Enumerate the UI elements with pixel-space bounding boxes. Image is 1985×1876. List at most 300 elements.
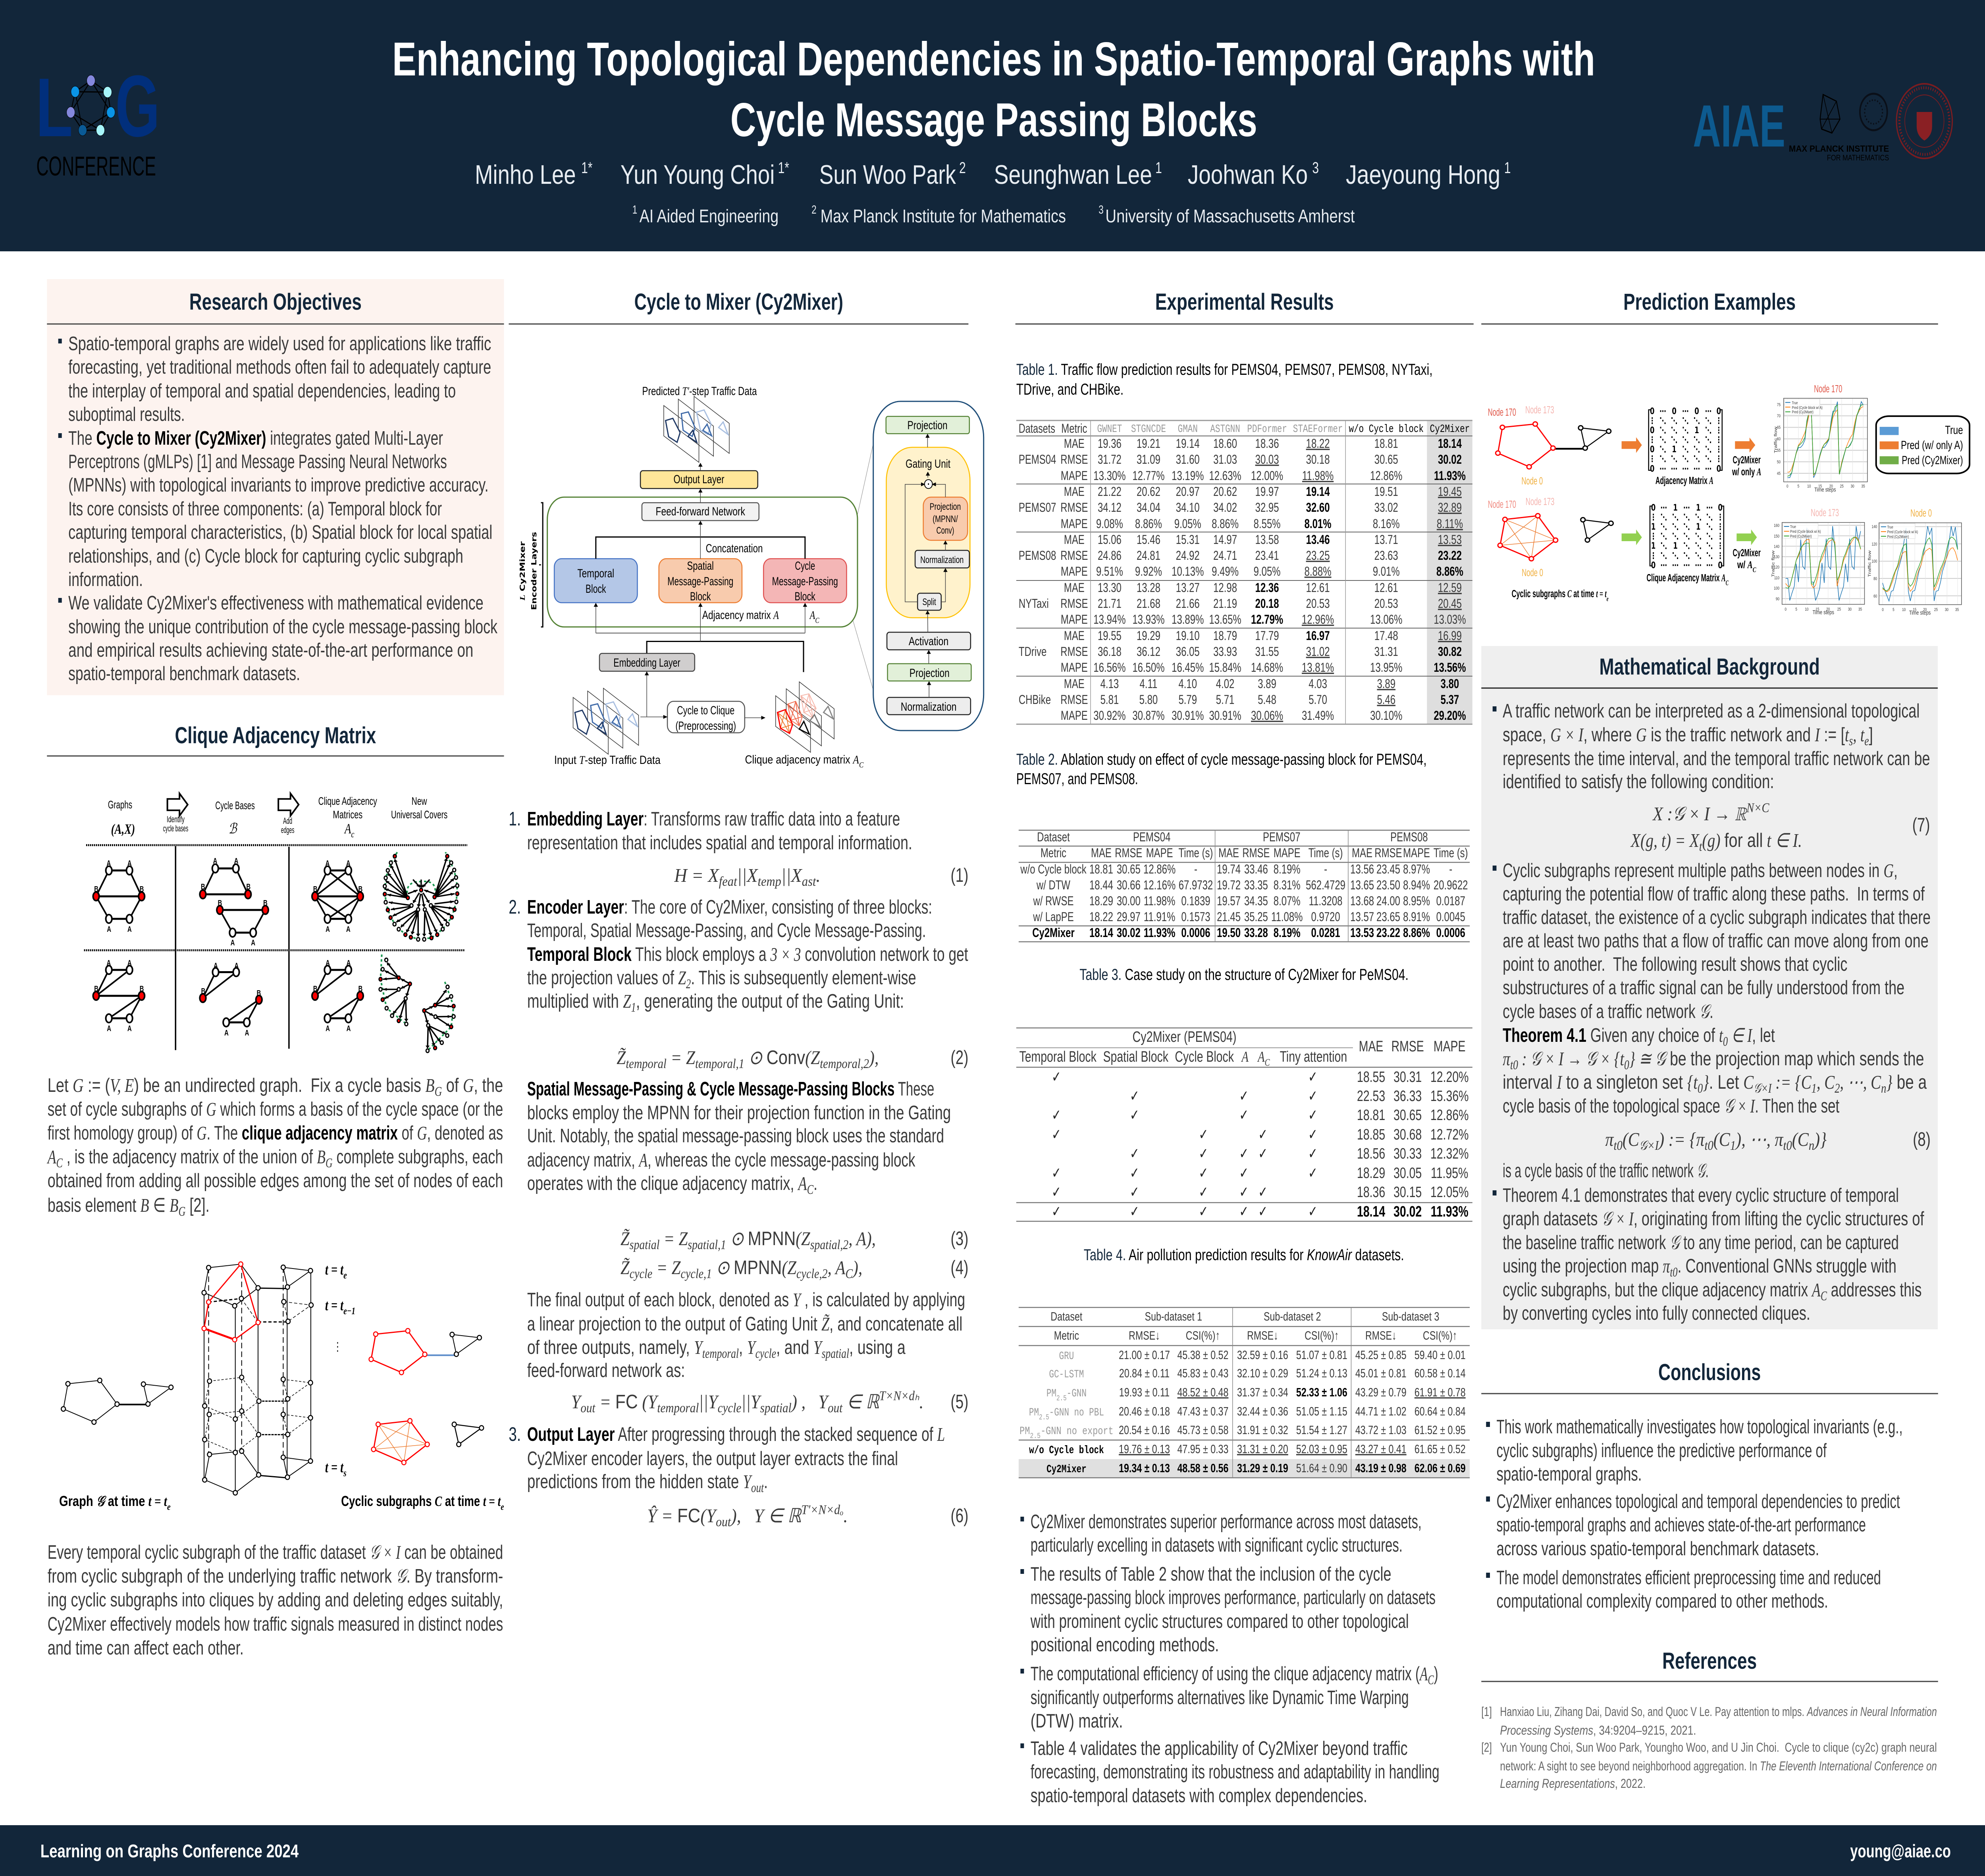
figure: prediction examples: 20 [1923,607,1927,612]
table 4: air pollution prediction: 19.76 ± 0.13 [1119,1442,1170,1456]
figure: prediction examples: ⋯ [1706,503,1713,513]
table 2: ablation study: 18.22 [1089,910,1113,924]
figure: Cy2Mixer architecture: Temporal [577,567,614,580]
table 3: case study: 12.05% [1430,1184,1469,1201]
figure: Cy2Mixer architecture: (MPNN/ [933,514,958,524]
figure: prediction examples: Pred (Cycle block w/ A) [1887,530,1918,534]
panel: mathematical background: Theorem 4.1 demonstrates that every cyclic structure of temporal [1503,1185,1899,1206]
panel: mathematical background: πt0 : 𝒢 × I → 𝒢 × {t0} ≅ 𝒢 be the projection map which sends the [1503,1048,1924,1072]
footer banner: Learning on Graphs Conference 2024 [40,1841,299,1861]
caption: table 1: Table 1. Traffic flow prediction results for PEMS04, PEMS07, PEMS08, NYTaxi, [1016,361,1433,378]
panel: mathematical background [1481,646,1938,1329]
bullet list: experimental findings: Cy2Mixer demonstrates superior performance across most datasets, [1031,1511,1422,1533]
figure: Cy2Mixer architecture: Cycle to Clique [677,704,734,717]
bullet list: experimental findings: particularly excelling in datasets with significant cyclic structures. [1031,1535,1403,1556]
table 4: air pollution prediction: 61.52 ± 0.95 [1415,1423,1466,1437]
figure: prediction examples: Node 170 [1814,383,1842,395]
title [392,33,1595,147]
authors: 1* [778,159,789,177]
figure: prediction examples: 25 [1840,484,1844,489]
affiliations: AI Aided Engineering [640,206,779,226]
panel: mathematical background: is a cycle basis of the traffic network 𝒢. [1503,1160,1709,1182]
figure: prediction examples: ⋱ [1672,512,1679,523]
table 1: traffic flow prediction: MAE [1064,484,1085,499]
table 2: ablation study: 0.1573 [1181,910,1210,924]
figure: prediction examples: ⋯ [1705,406,1711,416]
figure: prediction examples: 90 [1776,597,1780,602]
table 3: case study: ✓ [1199,1145,1208,1162]
table 1: traffic flow prediction: 21.68 [1137,596,1160,611]
table 1: traffic flow prediction: 8.86% [1436,564,1463,578]
table 4: air pollution prediction: CSI(%)↑ [1305,1328,1339,1342]
table 4: air pollution prediction: PM2.5-GNN no export [1019,1425,1114,1441]
table 3: case study: 30.15 [1393,1184,1422,1201]
table 3: case study: ✓ [1130,1183,1139,1201]
table 2: ablation study: 13.65 [1350,878,1374,892]
table 2: ablation study: 35.25 [1244,910,1268,924]
figure: prediction examples: 70 [1777,414,1781,418]
bullet list: experimental findings: The computational efficiency of using the clique adjacency matrix (AC) [1031,1663,1438,1687]
table 2: ablation study: 33.28 [1244,925,1268,940]
figure: prediction examples: Pred (Cycle block w/ A) [1790,529,1821,534]
figure: prediction examples: 0 [1650,464,1654,474]
figure: graph over time and cyclic subgraphs: t = te [325,1261,347,1281]
figure: Cy2Mixer architecture [518,384,984,769]
table 3: case study: Cycle Block [1175,1049,1234,1065]
equation 1: H = X feat||X temp||X ast. [674,865,821,889]
table 1: traffic flow prediction: 4.11 [1140,677,1157,691]
figure: prediction examples: 1 [1696,503,1700,513]
figure: prediction examples: 0 [1694,406,1699,416]
table 1: traffic flow prediction: 15.31 [1176,532,1200,547]
table 3: case study: 30.68 [1393,1126,1422,1143]
table 3: case study: 15.36% [1430,1088,1469,1105]
table 3: case study: ✓ [1258,1203,1268,1220]
table 1: traffic flow prediction: PEMS07 [1019,500,1056,515]
table 1: traffic flow prediction: 13.56% [1434,660,1466,675]
authors: Seunghwan Lee [994,160,1152,190]
equation 6 [647,1503,968,1529]
figure: prediction examples: True [1887,525,1893,529]
table 4: air pollution prediction: 48.52 ± 0.48 [1178,1385,1228,1399]
table 3: case study: 22.53 [1357,1088,1385,1105]
table 1: traffic flow prediction: MAPE [1061,564,1088,578]
table 2: ablation study: 18.14 [1089,925,1113,940]
table 1: traffic flow prediction: 30.03 [1255,452,1279,467]
table 1: traffic flow prediction: MAPE [1061,612,1088,627]
logo: LoG conference: CONFERENCE [36,151,156,181]
bullet list: research objectives [58,333,497,684]
table 3: case study: ✓ [1052,1106,1061,1124]
table 2: ablation study: w/ DTW [1036,878,1070,892]
figure: prediction examples: ⋱ [1661,522,1667,532]
figure: prediction examples: ⋯ [1694,464,1700,474]
panel: mathematical background: Cyclic subgraphs represent multiple paths between nodes in G, [1503,860,1898,881]
figure: prediction examples: Pred (Cy2Mixer) [1902,453,1963,467]
figure: prediction examples: ⋱ [1661,531,1667,542]
figure: graphs, cycle bases, clique adjacency matrices, universal covers: Matrices [333,809,362,821]
figure: Cy2Mixer architecture: Feed-forward Network [656,505,746,518]
table 1: traffic flow prediction: 15.84% [1209,660,1241,675]
table 2: ablation study: 30.00 [1117,894,1141,908]
table 4: air pollution prediction: 62.06 ± 0.69 [1415,1461,1466,1475]
logo: AIAE: AIAE [1693,93,1785,160]
table 2: ablation study: PEMS08 [1390,830,1428,844]
figure: prediction examples: 10 [1902,607,1906,612]
table 2: ablation study: 8.91% [1403,910,1430,924]
panel: mathematical background: cycle basis of the topological space 𝒢 × I. Then the set [1503,1095,1839,1117]
table 2: ablation study: MAPE [1403,846,1430,860]
table 1: traffic flow prediction: 18.79 [1213,629,1237,643]
table 4: air pollution prediction: 60.64 ± 0.84 [1415,1404,1466,1418]
table 1: traffic flow prediction: 30.87% [1132,708,1165,723]
table 1: traffic flow prediction: 23.41 [1255,548,1279,563]
reference list: Learning Representations , 2022. [1500,1776,1646,1791]
logo: LoG conference: L [36,61,73,154]
table 1: traffic flow prediction: 4.13 [1100,677,1119,691]
figure: prediction examples: ⋯ [1671,464,1677,474]
table 1: traffic flow prediction: 4.02 [1216,677,1234,691]
table 1: traffic flow prediction: 34.12 [1098,500,1122,515]
equation 7: (7) [1912,814,1930,836]
table 1: traffic flow prediction: 34.10 [1176,500,1200,515]
table 1: traffic flow prediction: ASTGNN [1210,423,1240,436]
table 2: ablation study: MAE [1091,846,1112,860]
table 1: traffic flow prediction: 36.18 [1098,644,1122,659]
figure: prediction examples: 10 [1805,607,1809,612]
table 1: traffic flow prediction: 3.80 [1441,677,1459,691]
bullet list: experimental findings: Table 4 validates the applicability of Cy2Mixer beyond traffic [1031,1738,1408,1759]
table 4: air pollution prediction: 21.00 ± 0.17 [1119,1348,1170,1362]
table 2: ablation study: 21.45 [1217,910,1241,924]
table 1: traffic flow prediction: 31.49% [1302,708,1334,723]
table 2: ablation study: Cy2Mixer [1032,925,1075,940]
table 3: case study: MAPE [1434,1038,1465,1055]
figure: Cy2Mixer architecture: Predicted T′-step Traffic Data [642,384,757,398]
figure: prediction examples: 20 [1829,484,1833,489]
table 1: traffic flow prediction: 23.25 [1306,548,1330,563]
text: model description: Temporal Block This block employs a 3 × 3 convolution network to get [527,944,968,965]
table 4: air pollution prediction: 45.83 ± 0.43 [1178,1366,1228,1380]
footer banner [0,1825,1985,1876]
figure: prediction examples: Pred (Cycle block w/ A) [1792,405,1823,410]
figure: prediction examples: ⋱ [1661,512,1667,523]
figure: prediction examples: Node 0 [1521,475,1543,487]
table 1: traffic flow prediction: 5.46 [1377,692,1395,707]
panel: mathematical background: cycle bases of a traffic network 𝒢. [1503,1001,1713,1022]
figure: Cy2Mixer architecture: Cycle [795,559,815,573]
equations 3 and 4: (4) [951,1257,968,1278]
text: model description: Unit. Notably, the spatial message-passing block uses the standard [527,1125,944,1147]
text: model description: 1. [509,808,521,830]
equation 7: X :𝒢 × I → ℝ N×C [1652,801,1769,825]
title: Cycle Message Passing Blocks [730,93,1257,147]
table 3: case study: ✓ [1199,1126,1208,1143]
table 1: traffic flow prediction: 29.20% [1434,708,1466,723]
figure: prediction examples: 0 [1650,406,1654,416]
table 1: traffic flow prediction: 9.49% [1212,564,1239,578]
table 1: traffic flow prediction: 34.02 [1213,500,1237,515]
text: temporal cyclic subgraphs: Cy2Mixer effectively models how traffic signals measured in distinct nodes [48,1614,503,1635]
equation 5: (5) [951,1391,968,1413]
table 2: ablation study: 0.1839 [1181,894,1210,908]
table 2: ablation study: MAPE [1146,846,1173,860]
table 1: traffic flow prediction: 15.46 [1137,532,1160,547]
table 1: traffic flow prediction: 24.86 [1098,548,1122,563]
equation 8 [1605,1129,1931,1153]
table 1: traffic flow prediction: 31.09 [1137,452,1160,467]
figure: prediction examples: ⋮ [1717,551,1723,561]
figure: prediction examples: 0 [1650,425,1654,436]
authors: 2 [959,159,966,177]
figure: prediction examples: ⋱ [1682,454,1689,464]
bullet list: conclusions: computational complexity compared to other methods. [1496,1591,1828,1612]
table 3: case study: 18.81 [1357,1107,1385,1124]
figure: prediction examples: ⋯ [1683,560,1690,571]
table 1: traffic flow prediction: 21.19 [1213,596,1237,611]
figure: prediction examples: ⋯ [1661,503,1667,513]
figure: graph over time and cyclic subgraphs: Graph 𝒢 at time t = te [59,1493,171,1512]
figure: prediction examples: ⋱ [1672,522,1679,532]
figure: prediction examples: Node 173 [1526,496,1554,507]
table 1: traffic flow prediction: 14.68% [1251,660,1283,675]
table 4: air pollution prediction: 43.72 ± 1.03 [1355,1423,1407,1437]
equations 3 and 4: (3) [951,1228,968,1249]
bullet list: research objectives: (MPNNs) with topological invariants to improve predictive accuracy. [68,474,489,496]
figure: prediction examples: 0 [1717,406,1721,416]
caption: table 4: Table 4. Air pollution prediction results for KnowAir datasets. [1084,1246,1404,1264]
table 3: case study: MAE [1359,1038,1383,1055]
figure: prediction examples: 0 [1650,444,1654,455]
figure: Cy2Mixer architecture: AC [809,608,819,625]
authors: 1 [1155,159,1162,177]
table 1: traffic flow prediction: 36.05 [1176,644,1200,659]
figure: prediction examples: ⋱ [1695,531,1702,542]
table 1: traffic flow prediction: 8.86% [1135,517,1162,531]
text: model description: of three outputs, namely, Ytemporal, Ycycle, and Yspatial, using a [527,1337,906,1361]
bullet list: conclusions [1486,1416,1903,1612]
figure: prediction examples: ⋯ [1682,406,1689,416]
figure: Cy2Mixer architecture: Encoder Layers [530,532,538,610]
figure: prediction examples: ⋮ [1650,551,1657,561]
text: clique adjacency matrix definition [46,1075,503,1219]
table 1: traffic flow prediction: 8.01% [1305,517,1332,531]
equation 2: Z̃temporal = Z temporal,1 ⊙ Conv(Ztemporal,2 ), [617,1047,879,1071]
table 2: ablation study: w/o Cycle block [1020,862,1087,876]
bullet list: research objectives: spatio-temporal benchmark datasets. [68,663,300,684]
table 1: traffic flow prediction: 5.37 [1441,692,1459,707]
figure: Cy2Mixer architecture: (Preprocessing) [675,719,736,733]
figure: prediction examples: True [1790,524,1796,529]
table 1: traffic flow prediction: 13.93% [1132,612,1165,627]
table 2: ablation study: 67.9732 [1179,878,1213,892]
table 1: traffic flow prediction: 5.80 [1139,692,1158,707]
bullet list: conclusions: Cy2Mixer enhances topological and temporal dependencies to predict [1496,1491,1900,1512]
table 3: case study [1016,1028,1472,1221]
caption: table 3: Table 3. Case study on the structure of Cy2Mixer for PeMS04. [1079,966,1409,983]
table 3: case study: 12.86% [1430,1107,1469,1124]
table 1: traffic flow prediction: MAE [1064,532,1085,547]
table 2: ablation study: 18.29 [1089,894,1113,908]
table 3: case study: ✓ [1052,1183,1061,1201]
table 4: air pollution prediction: 32.44 ± 0.36 [1237,1404,1288,1418]
figure: prediction examples: 35 [1955,607,1959,612]
table 1: traffic flow prediction: 30.18 [1306,452,1330,467]
table 1: traffic flow prediction: 8.11% [1437,517,1463,531]
table 1: traffic flow prediction: 18.14 [1438,436,1462,451]
table 2: ablation study: 0.0281 [1311,925,1340,940]
figure: Cy2Mixer architecture: L Cy2Mixer [518,541,526,601]
figure: prediction examples: Time steps [1909,609,1931,616]
table 2: ablation study: 8.19% [1274,925,1301,940]
table 2: ablation study: 19.74 [1217,862,1241,876]
panel: mathematical background: identified to satisfy the following condition: [1503,771,1774,792]
figure: prediction examples: ⋱ [1682,416,1689,426]
table 2: ablation study: PEMS07 [1263,830,1301,844]
figure: prediction examples: Adjacency Matrix A [1655,474,1713,486]
figure: Cy2Mixer architecture: Adjacency matrix A [702,608,779,622]
table 2: ablation study: 0.0187 [1436,894,1465,908]
figure: prediction examples: Cyclic subgraphs C at time t = te [1512,588,1609,603]
affiliations: 1 [632,203,637,216]
table 2: ablation study: 8.31% [1274,878,1301,892]
equation 8: πt0(C𝒢×I) := {π t0(C1), ⋯, π t0(Cn)} [1605,1129,1827,1153]
figure: prediction examples: ⋮ [1649,435,1655,445]
figure: prediction examples: ⋱ [1706,541,1713,551]
table 2: ablation study: 30.65 [1117,862,1141,876]
figure: prediction examples: 55 [1777,448,1781,453]
figure: prediction examples: Traffic flow [1773,426,1778,453]
table 1: traffic flow prediction: RMSE [1060,500,1088,515]
panel: mathematical background: graph datasets 𝒢 × I, originating from lifting the cyclic structures of [1503,1208,1924,1230]
table 3: case study: Spatial Block [1103,1049,1168,1065]
table 3: case study: ✓ [1239,1164,1249,1182]
heading: research objectives: Research Objectives [189,289,362,314]
figure: prediction examples: ⋮ [1715,454,1722,464]
figure: Cy2Mixer architecture: Projection [910,666,950,680]
text: temporal cyclic subgraphs [48,1542,503,1659]
figure: prediction examples: 25 [1934,607,1938,612]
logo: LoG conference: G [115,58,160,155]
logo: Max Planck Institute [1789,94,1889,162]
figure: prediction examples: ⋮ [1717,512,1723,523]
table 1: traffic flow prediction: 9.01% [1373,564,1400,578]
panel: mathematical background: represents the time interval, and the temporal traffic network can be [1503,748,1930,769]
figure: prediction examples: ⋱ [1706,512,1713,523]
table 4: air pollution prediction: Metric [1054,1328,1079,1342]
table 2: ablation study: w/ RWSE [1033,894,1073,908]
table 1: traffic flow prediction: MAPE [1061,708,1088,723]
figure: prediction examples: 0 [1718,503,1723,513]
figure: prediction examples: ⋱ [1671,416,1677,426]
figure: prediction examples: ⋮ [1715,425,1722,436]
table 1: traffic flow prediction: MAPE [1061,660,1088,675]
table 2: ablation study: w/ LapPE [1033,910,1074,924]
equation 5: Yout = FC (Ytemporal ||Ycycle||Yspatial) , Y out ∈ ℝ T×N×dₕ . [571,1389,923,1415]
heading: conclusions: Conclusions [1658,1359,1761,1385]
table 2: ablation study: 23.65 [1376,910,1400,924]
text: model description: operates with the clique adjacency matrix, AC. [527,1173,817,1197]
figure: prediction examples: 1 [1651,522,1655,532]
table 3: case study: ✓ [1258,1183,1268,1201]
figure: Cy2Mixer architecture: Input T-step Traffic Data [554,753,661,767]
table 1: traffic flow prediction: Metric [1061,421,1087,436]
table 4: air pollution prediction: 45.01 ± 0.81 [1355,1366,1407,1380]
table 1: traffic flow prediction: 15.06 [1098,532,1122,547]
figure: prediction examples: 1 [1672,444,1677,455]
figure: prediction examples: Clique Adjacency Matrix AC [1646,572,1729,587]
table 1: traffic flow prediction: 5.70 [1309,692,1327,707]
table 2: ablation study: - [1324,862,1327,876]
authors [475,159,1511,190]
table 1: traffic flow prediction: 16.50% [1132,660,1165,675]
table 1: traffic flow prediction: 24.92 [1176,548,1200,563]
figure: prediction examples: Node 170 [1488,406,1516,418]
figure: Cy2Mixer architecture: Split [922,597,936,607]
table 1: traffic flow prediction: 16.45% [1172,660,1204,675]
table 1: traffic flow prediction: 31.72 [1098,452,1122,467]
text: model description: adjacency matrix, A, whereas the cycle message-passing block [527,1149,915,1171]
table 3: case study: ✓ [1239,1183,1249,1201]
table 1: traffic flow prediction: 18.81 [1374,436,1398,451]
figure: prediction examples: Pred (w/ only A) [1901,438,1963,452]
figure: prediction examples: 35 [1858,607,1862,612]
table 2: ablation study: 23.50 [1376,878,1400,892]
figure: prediction examples: ⋱ [1694,444,1700,455]
table 1: traffic flow prediction: STGNCDE [1131,423,1166,436]
table 2: ablation study: 30.02 [1117,925,1141,940]
table 3: case study: ✓ [1258,1145,1268,1162]
table 3: case study: 18.14 [1357,1203,1385,1220]
reference list: network: A sight to see beyond neighborhood aggregation. In The Eleventh International Conference on [1500,1759,1937,1773]
table 4: air pollution prediction: Sub-dataset 3 [1382,1309,1439,1323]
equation 1: (1) [951,865,968,886]
figure: graph over time and cyclic subgraphs: Cyclic subgraphs C at time t = te [341,1493,504,1512]
table 1: traffic flow prediction: 20.62 [1213,484,1237,499]
table 1: traffic flow prediction: 13.27 [1176,580,1200,595]
table 3: case study: 12.32% [1430,1145,1469,1162]
figure: prediction examples: ⋱ [1672,551,1679,561]
figure: graphs, cycle bases, clique adjacency matrices, universal covers: Universal Covers [391,809,447,821]
table 1: traffic flow prediction: CHBike [1019,692,1051,707]
table 4: air pollution prediction: 47.95 ± 0.33 [1178,1442,1228,1456]
bullet list: research objectives: relationships, and (c) Cycle block for capturing cyclic subgraph [68,546,463,567]
bullet list: research objectives: Its core consists of three components: (a) Temporal block for [68,498,442,520]
figure: graphs, cycle bases, clique adjacency matrices, universal covers: AABBAA [313,958,362,1033]
table 1: traffic flow prediction: 16.99 [1438,629,1462,643]
figure: Cy2Mixer architecture: Conv) [937,526,954,536]
figure: prediction examples: Pred (Cy2Mixer) [1887,534,1909,539]
figure: prediction examples: ⋱ [1683,551,1690,561]
text: clique adjacency matrix definition: set of cycle subgraphs of G which forms a basis of the cycle space (or the [48,1099,503,1120]
table 2: ablation study: 0.9720 [1311,910,1340,924]
figure: prediction examples: ⋱ [1659,425,1666,436]
bullet list: research objectives: We validate Cy2Mixer's effectiveness with mathematical evidence [68,592,484,614]
table 4: air pollution prediction: 52.03 ± 0.95 [1296,1442,1347,1456]
table 2: ablation study: 12.16% [1143,878,1176,892]
figure: graphs, cycle bases, clique adjacency matrices, universal covers: Add [283,816,292,826]
heading: references: References [1662,1648,1757,1674]
table 2: ablation study: 30.66 [1117,878,1141,892]
figure: prediction examples: ⋮ [1649,416,1655,426]
figure: prediction examples: 0 [1882,607,1884,612]
table 2: ablation study: 8.97% [1403,862,1430,876]
table 2: ablation study: 13.56 [1350,862,1374,876]
panel: mathematical background: using the projection map πt0. Conventional GNNs struggle with [1503,1255,1896,1280]
figure: prediction examples: 60 [1777,437,1781,442]
figure: prediction examples: 50 [1777,460,1781,465]
table 1: traffic flow prediction: MAPE [1061,469,1088,483]
